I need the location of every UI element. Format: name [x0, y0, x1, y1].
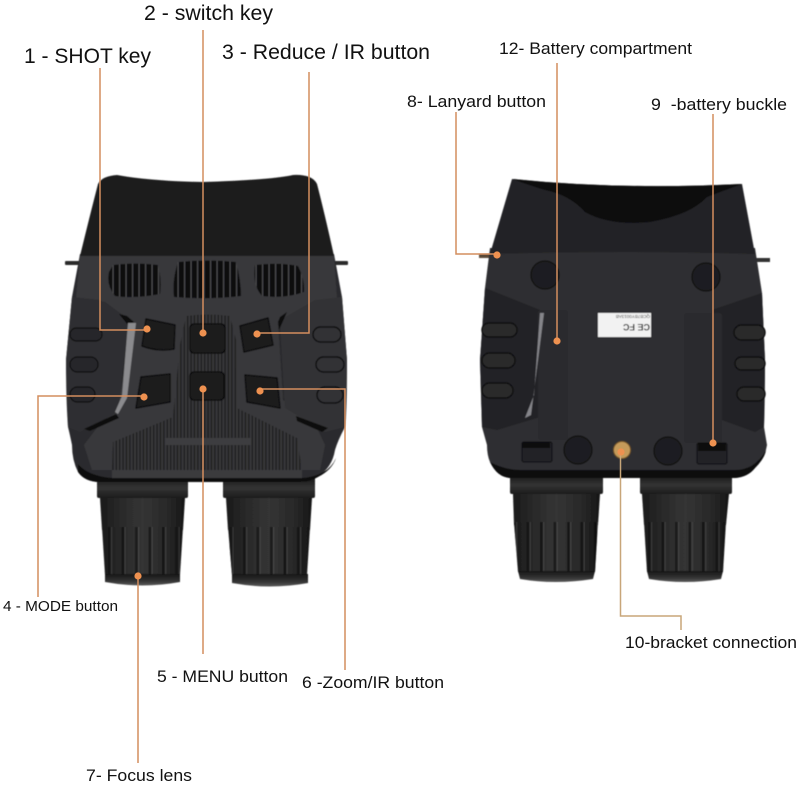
leader 1: SHOT key	[100, 68, 147, 330]
eye cup opening	[513, 179, 742, 223]
grip slots, rear	[482, 323, 765, 401]
central ribbed panel	[112, 314, 302, 470]
eye cup, rear view	[490, 179, 755, 254]
label: 8 Lanyard button: 8- Lanyard button	[407, 92, 546, 111]
label: 2 switch key: 2 - switch key	[144, 2, 274, 25]
tripod screw	[614, 442, 630, 458]
control buttons	[136, 318, 280, 408]
callout dots	[134, 251, 717, 580]
label: 6 Zoom/IR button: 6 -Zoom/IR button	[302, 673, 444, 692]
product label: CE FC	[622, 322, 650, 332]
leader 8: Lanyard	[456, 112, 497, 254]
side studs	[65, 261, 348, 265]
grip slots left	[70, 328, 102, 402]
leader 7: Focus lens	[137, 576, 139, 763]
label: 10 bracket connection: 10-bracket connection	[625, 633, 797, 652]
battery cover left	[538, 310, 568, 440]
side grip left	[66, 297, 128, 432]
battery buckle left	[522, 442, 552, 462]
side grip right	[280, 297, 347, 432]
lower edge	[78, 458, 336, 482]
eye cup, front view	[80, 175, 334, 256]
label: 7 Focus lens: 7- Focus lens	[86, 766, 192, 785]
side grip right, rear	[712, 293, 765, 432]
silver stripe, rear	[525, 313, 544, 418]
leader 6: Zoom/IR	[260, 389, 345, 670]
label: 4 MODE button: 4 - MODE button	[3, 598, 118, 615]
label: 3 Reduce / IR button: 3 - Reduce / IR button	[222, 41, 430, 64]
leader 4: MODE	[38, 396, 144, 597]
battery buckle right	[697, 443, 727, 464]
main body, rear view	[480, 248, 767, 478]
silver stripe	[115, 323, 136, 414]
side stud right	[755, 258, 770, 262]
panel embossed plate	[165, 438, 251, 445]
leader 9: battery buckle	[712, 114, 714, 443]
leader 2: switch key	[202, 30, 204, 333]
battery cover right	[684, 313, 722, 443]
label: 12 Battery compartment: 12- Battery compartment	[499, 39, 692, 58]
side grip left, rear	[480, 288, 540, 430]
label: 5 MENU button: 5 - MENU button	[157, 667, 288, 686]
side stud left	[479, 254, 493, 258]
round feet	[531, 261, 720, 465]
right lens barrel, front view	[223, 476, 315, 586]
grip accent marks	[84, 312, 328, 432]
product label: QCB7BY0013AB	[616, 314, 650, 319]
leader 3: Reduce / IR	[257, 72, 309, 333]
right lens barrel, rear view	[640, 474, 732, 582]
left binocular, front view	[65, 175, 348, 586]
label: 9 battery buckle: 9 -battery buckle	[651, 95, 787, 114]
face plate	[76, 256, 337, 470]
right binocular, rear view	[479, 179, 770, 582]
callout leader lines	[38, 30, 713, 763]
leader 5: MENU	[202, 389, 204, 654]
vents	[108, 260, 304, 298]
main body, front view	[66, 254, 347, 482]
panel base band	[112, 470, 302, 478]
left lens barrel, rear view	[510, 474, 603, 582]
lower edge, rear	[490, 450, 766, 478]
label: 1 SHOT key: 1 - SHOT key	[24, 45, 151, 68]
leader 10: bracket connection	[620, 452, 681, 630]
left lens barrel, front view	[97, 476, 188, 586]
grip slots right	[313, 327, 344, 403]
product label	[598, 313, 651, 337]
leader 12: Battery compartment	[556, 63, 558, 341]
